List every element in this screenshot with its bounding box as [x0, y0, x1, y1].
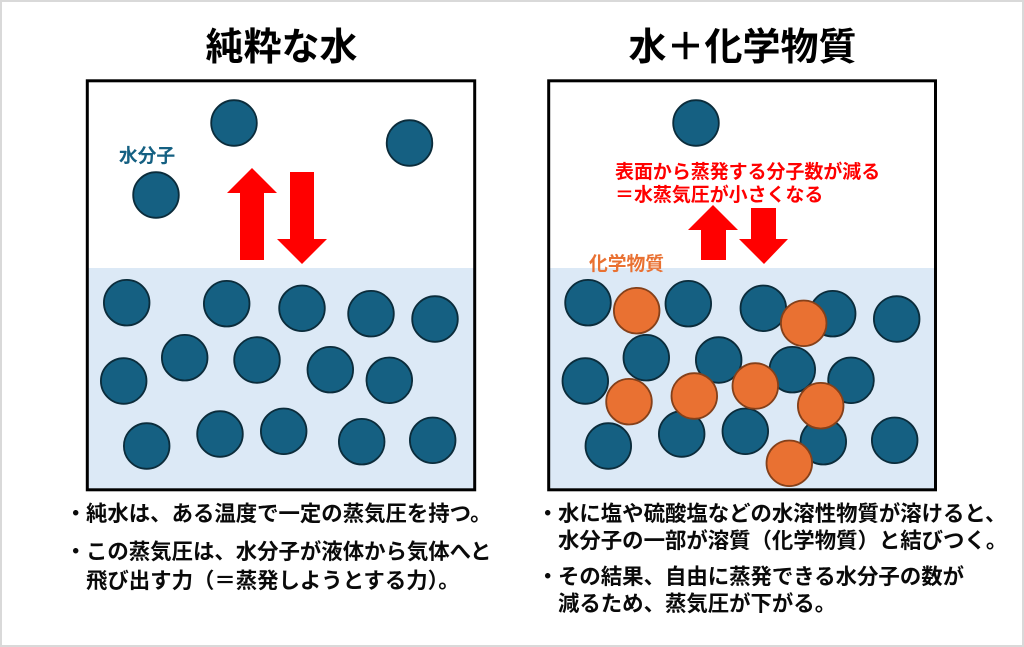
- text block: water plus chemical notes: 減るため、蒸気圧が下がる。: [558, 591, 836, 616]
- text block: pure water notes: [65, 502, 492, 593]
- text block: pure water notes: 純水は、ある温度で一定の蒸気圧を持つ。: [86, 502, 492, 526]
- text block: water plus chemical notes: 水に塩や硫酸塩などの水溶性物質が溶けると、: [558, 501, 1006, 526]
- panel: water plus chemical: [549, 27, 936, 490]
- container outline: [549, 81, 936, 490]
- chemical molecules: [606, 288, 844, 486]
- vapor molecule: [673, 100, 719, 146]
- water layer: [88, 268, 474, 490]
- liquid water molecules: [101, 280, 458, 469]
- container outline: [87, 81, 475, 490]
- label: chemical substance: 化学物質: [589, 252, 664, 274]
- text block: water plus chemical notes: ・: [537, 502, 558, 526]
- text block: water plus chemical notes: その結果、自由に蒸発できる水分子の数が: [558, 564, 964, 589]
- text block: pure water notes: 飛び出す力（＝蒸発しようとする力）。: [86, 569, 460, 593]
- water layer: [550, 268, 935, 490]
- arrow: evaporation up: [227, 168, 277, 260]
- arrow: evaporation up: [688, 205, 738, 260]
- text block: water plus chemical notes: ・: [537, 565, 558, 589]
- callout: fewer molecules evaporate: [615, 160, 880, 206]
- panel: pure water: [87, 27, 475, 490]
- label: water molecule: 水分子: [119, 145, 175, 166]
- arrow: condensation down: [739, 208, 788, 264]
- arrow: condensation down: [277, 172, 327, 264]
- text block: water plus chemical notes: 水分子の一部が溶質（化学物質）と結びつく。: [558, 528, 1007, 553]
- text block: pure water notes: ・: [65, 540, 86, 564]
- text block: pure water notes: ・: [65, 502, 86, 526]
- callout: fewer molecules evaporate: ＝水蒸気圧が小さくなる: [615, 183, 823, 206]
- heading: pure water: 純粋な水: [205, 27, 358, 69]
- vapor molecules: [133, 100, 432, 218]
- callout: fewer molecules evaporate: 表面から蒸発する分子数が減る: [615, 160, 880, 183]
- text block: pure water notes: この蒸気圧は、水分子が液体から気体へと: [86, 539, 491, 564]
- heading: water plus chemical: 水＋化学物質: [628, 27, 857, 69]
- liquid water molecules: [562, 280, 920, 469]
- text block: water plus chemical notes: [537, 501, 1007, 616]
